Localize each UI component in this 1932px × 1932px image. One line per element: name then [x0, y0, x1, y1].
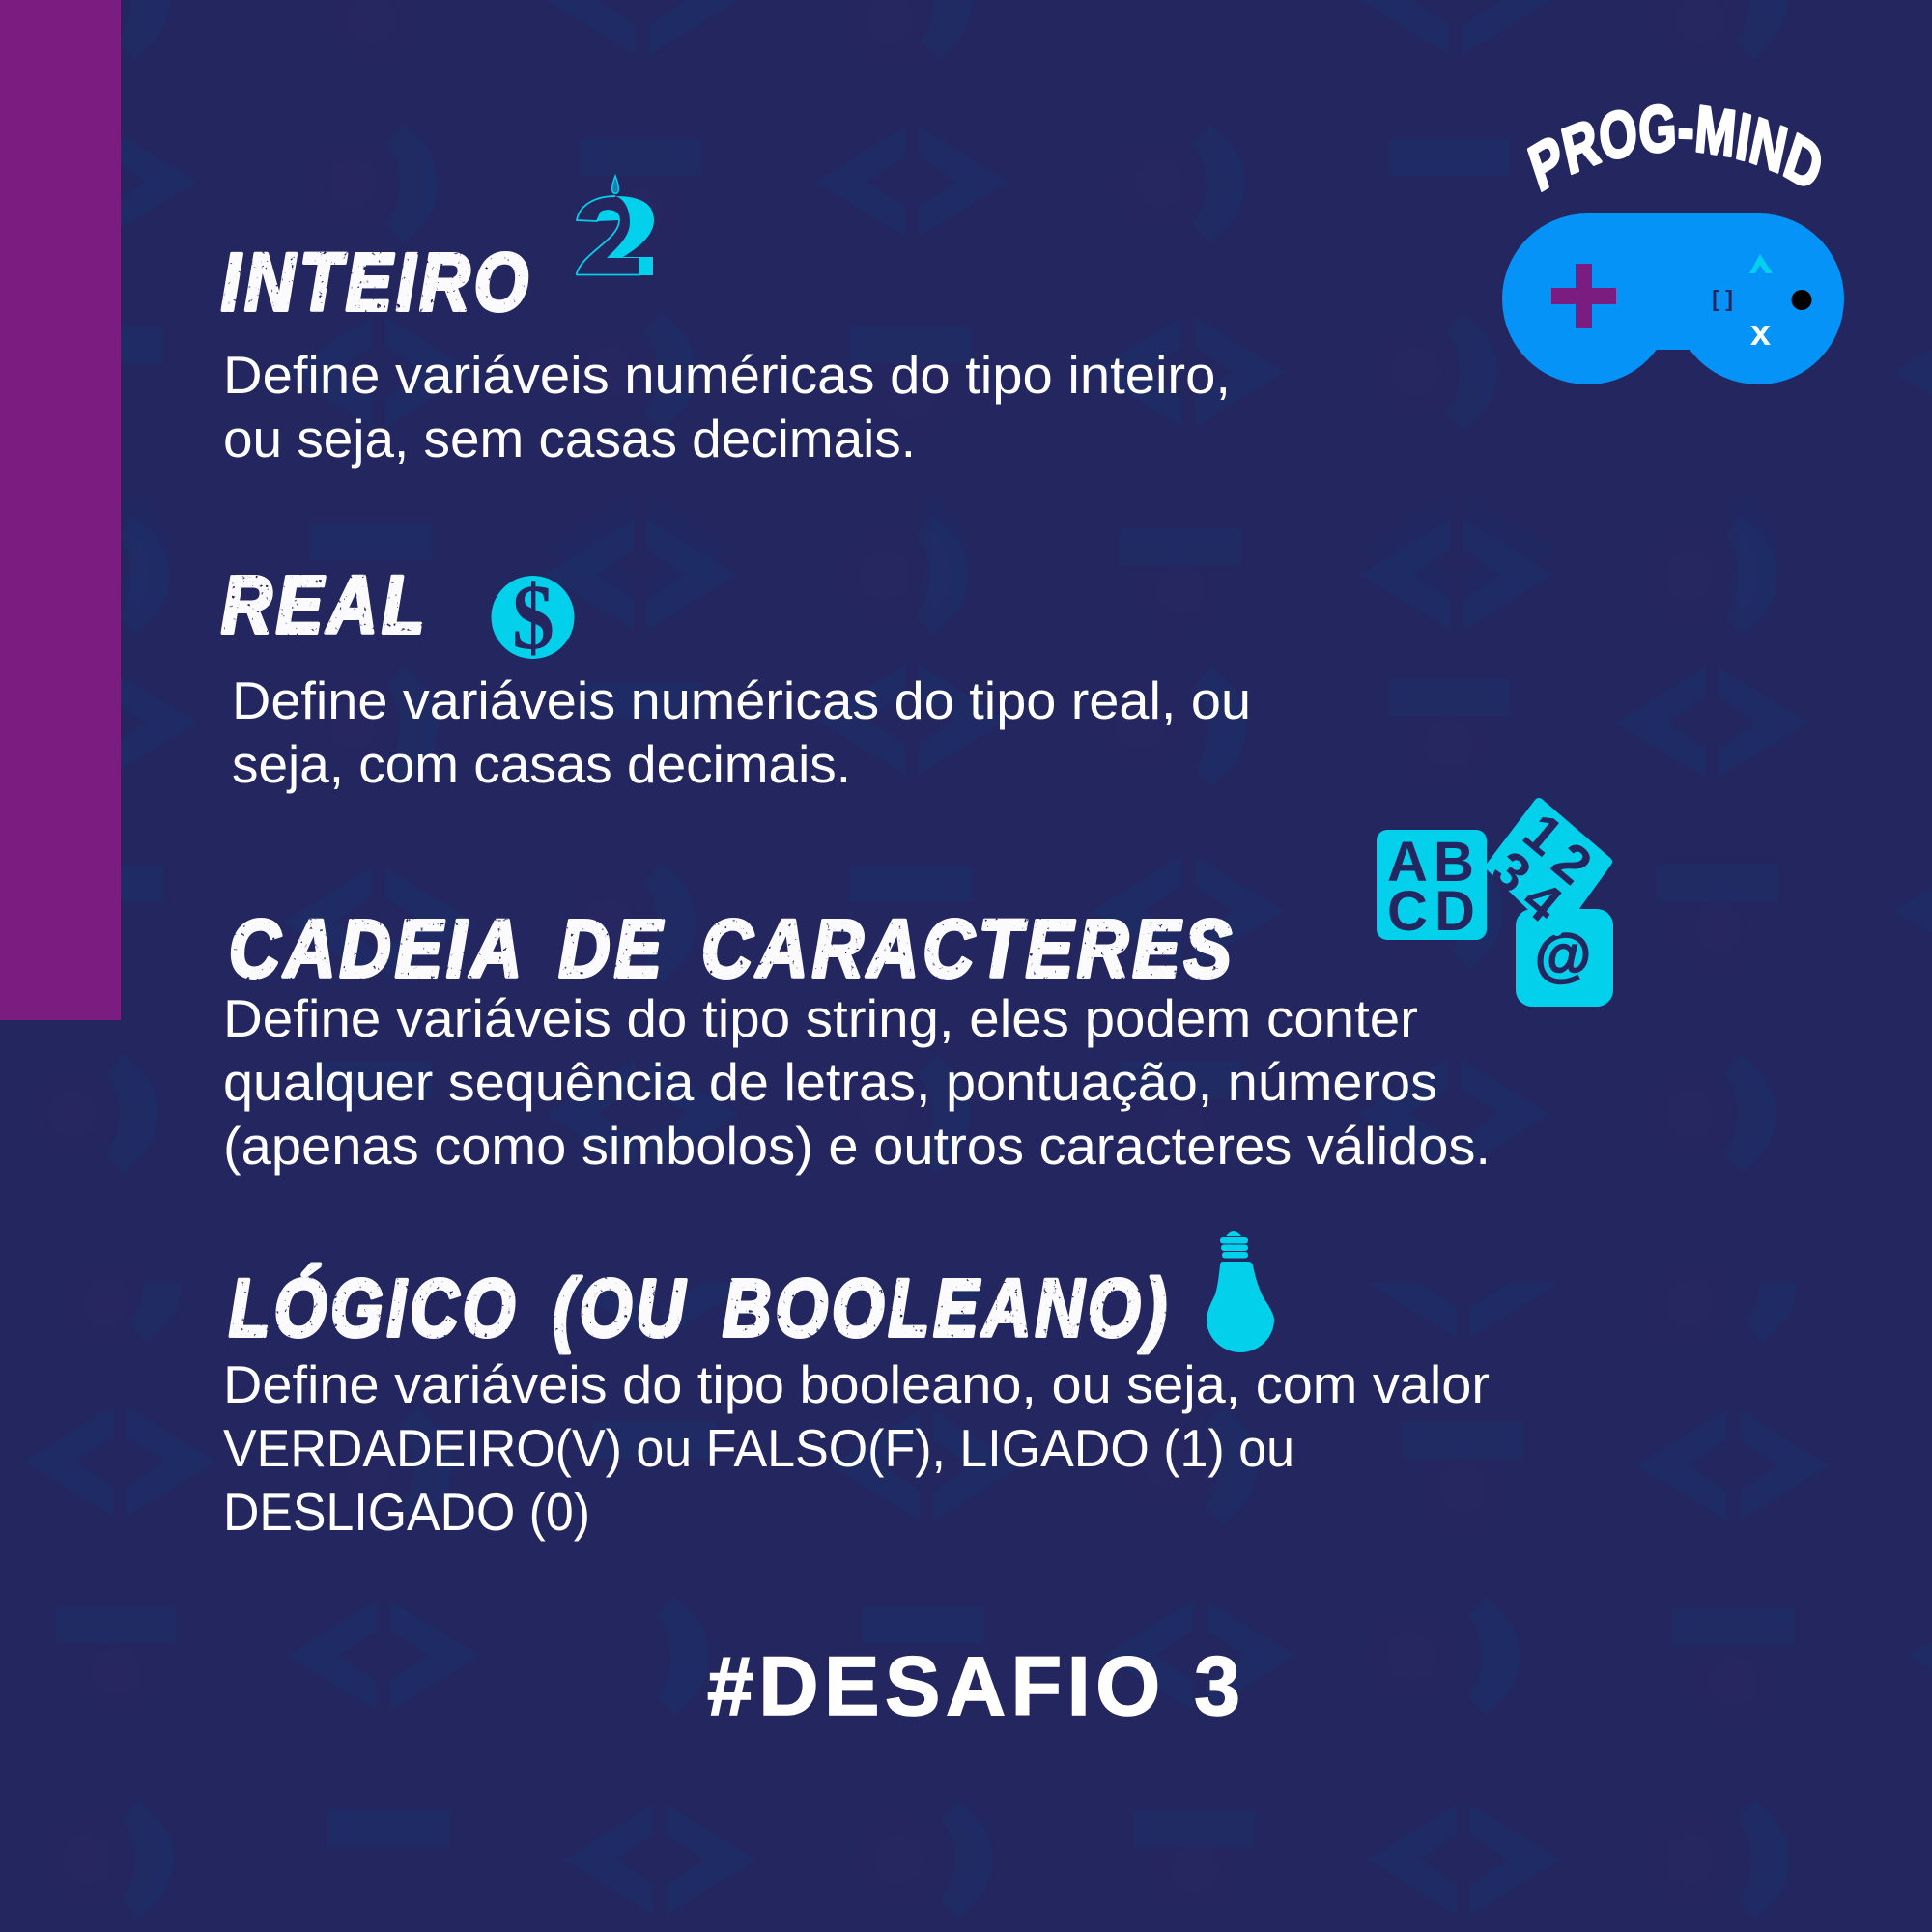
block: ABCD	[1377, 830, 1487, 943]
d-pad plus	[1551, 264, 1616, 328]
section: cadeia de caracteres	[223, 801, 1613, 1176]
square button: [ ]	[1712, 286, 1733, 311]
description: logico: Define variáveis do tipo booleano, ou seja, com valor	[223, 1354, 1490, 1414]
description: cadeia de caracteres	[223, 988, 1491, 1176]
block: 1234: 2	[1541, 830, 1604, 896]
description: cadeia de caracteres: (apenas como simbolos) e outros caracteres válidos.	[223, 1116, 1491, 1176]
section: logico	[223, 1231, 1490, 1542]
background pattern of code symbols	[491, 178, 1844, 1321]
icon: light bulb	[1207, 1231, 1274, 1352]
icon: dollar coin	[491, 565, 574, 668]
heading: real: REAL	[221, 559, 429, 650]
footer title: desafio 3: #DESAFIO 3	[707, 1640, 1240, 1733]
block: ABCD: D	[1435, 880, 1475, 943]
icon: letter and number blocks	[1377, 801, 1613, 1007]
logo: PROG-MIND game controller	[1502, 104, 1844, 384]
description: logico	[223, 1354, 1490, 1542]
logo text: PROG-MIND arched: PROG-MIND	[1526, 104, 1822, 192]
description: inteiro: ou seja, sem casas decimais.	[223, 409, 916, 469]
circle button	[1791, 290, 1812, 310]
purple side bar	[0, 0, 121, 1020]
block: 1234: 1	[1512, 801, 1575, 867]
triangle button	[1749, 254, 1773, 273]
heading: inteiro: INTEIRO	[221, 237, 532, 327]
section: inteiro	[221, 176, 1231, 469]
block: at sign: @	[1535, 923, 1591, 987]
controller body	[1502, 213, 1844, 384]
section: real	[221, 559, 1251, 794]
heading: logico ou booleano: LÓGICO (OU BOOLEANO)	[229, 1263, 1171, 1353]
block: 1234: 4	[1511, 867, 1574, 934]
description: cadeia de caracteres: Define variáveis do tipo string, eles podem conter	[223, 988, 1418, 1048]
icon: number 2 candle	[576, 176, 654, 275]
block: ABCD: A	[1387, 831, 1428, 894]
description: inteiro	[223, 345, 1231, 469]
block: 1234	[1480, 801, 1607, 934]
description: cadeia de caracteres: qualquer sequência de letras, pontuação, números	[223, 1052, 1437, 1112]
icon: dollar coin: $	[512, 565, 554, 668]
description: logico: VERDADEIRO(V) ou FALSO(F), LIGADO (1) ou	[223, 1418, 1294, 1478]
block: ABCD: B	[1434, 831, 1474, 894]
description: logico: DESLIGADO (0)	[223, 1482, 590, 1542]
heading: cadeia de caracteres: CADEIA DE CARACTERES	[229, 903, 1236, 994]
description: real	[232, 670, 1251, 794]
x button: x	[1750, 313, 1771, 354]
block: 1234: 3	[1480, 838, 1543, 905]
description: inteiro: Define variáveis numéricas do tipo inteiro,	[223, 345, 1231, 405]
block: at sign	[1516, 909, 1613, 1007]
block: ABCD: C	[1387, 880, 1428, 943]
description: real: Define variáveis numéricas do tipo real, ou	[232, 670, 1251, 730]
description: real: seja, com casas decimais.	[232, 734, 851, 794]
